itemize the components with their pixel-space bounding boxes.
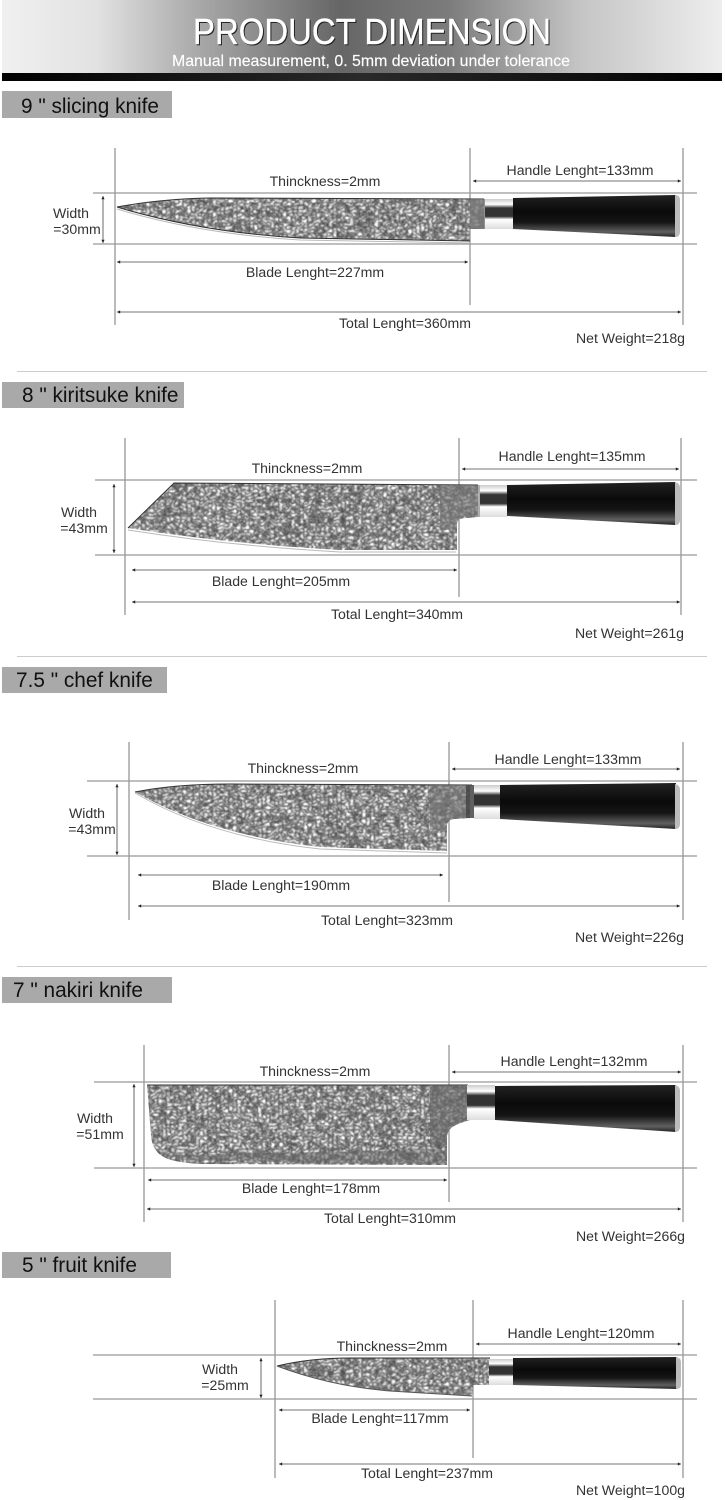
heading: 9 " slicing knife <box>21 95 159 118</box>
knife illustration <box>117 195 680 243</box>
width dimension <box>76 1084 134 1167</box>
panel: 8 inch kiritsuke knife <box>2 382 697 641</box>
width dimension <box>60 484 114 553</box>
total dimension: Total Lenght=323mm <box>321 912 453 928</box>
thickness label: Thinckness=2mm <box>270 173 380 189</box>
net weight: Net Weight=218g <box>576 330 685 346</box>
heading: 7.5 " chef knife <box>16 669 153 692</box>
panel: 5 inch fruit knife <box>2 1252 697 1498</box>
blade dimension: Blade Lenght=178mm <box>242 1180 380 1196</box>
thickness label: Thinckness=2mm <box>260 1063 370 1079</box>
total dimension: Total Lenght=340mm <box>331 606 463 622</box>
blade dimension: Blade Lenght=117mm <box>311 1410 449 1426</box>
handle dimension: Handle Lenght=133mm <box>507 162 653 178</box>
width dimension: Width <box>61 504 97 520</box>
width dimension: Width <box>77 1110 113 1126</box>
subtitle: Manual measurement, 0. 5mm deviation under tolerance <box>172 53 570 70</box>
panel: 7.5 inch chef knife <box>2 667 697 945</box>
knife illustration <box>147 1085 680 1165</box>
width dimension <box>53 196 103 243</box>
blade dimension: Blade Lenght=227mm <box>246 264 384 280</box>
thickness label: Thinckness=2mm <box>337 1338 447 1354</box>
heading: 7 " nakiri knife <box>13 979 143 1002</box>
width dimension: Width <box>69 805 105 821</box>
net weight: Net Weight=100g <box>576 1482 685 1498</box>
total dimension: Total Lenght=237mm <box>361 1465 493 1481</box>
handle dimension: Handle Lenght=135mm <box>499 448 645 464</box>
heading <box>2 91 172 118</box>
heading: 8 " kiritsuke knife <box>22 384 178 407</box>
width dimension: =43mm <box>68 821 116 837</box>
width dimension: =43mm <box>60 520 108 536</box>
blade dimension: Blade Lenght=205mm <box>212 573 350 589</box>
thickness label: Thinckness=2mm <box>252 460 362 476</box>
net weight: Net Weight=226g <box>575 929 684 945</box>
total dimension: Total Lenght=360mm <box>339 315 471 331</box>
width dimension: Width <box>53 205 89 221</box>
width dimension: Width <box>202 1361 238 1377</box>
handle dimension: Handle Lenght=132mm <box>501 1053 647 1069</box>
total dimension: Total Lenght=310mm <box>324 1210 456 1226</box>
net weight: Net Weight=261g <box>575 625 684 641</box>
heading <box>2 1252 171 1278</box>
knife illustration <box>135 783 680 853</box>
width dimension: =51mm <box>76 1126 124 1142</box>
handle dimension: Handle Lenght=133mm <box>495 751 641 767</box>
width dimension <box>201 1358 261 1398</box>
knife illustration <box>128 482 680 552</box>
width dimension <box>68 784 117 855</box>
title: PRODUCT DIMENSION <box>193 11 551 52</box>
width dimension: =30mm <box>53 221 101 237</box>
panel: 9 inch slicing knife <box>2 91 697 346</box>
blade dimension: Blade Lenght=190mm <box>212 877 350 893</box>
width dimension: =25mm <box>201 1377 249 1393</box>
panel: 7 inch nakiri knife <box>2 977 697 1244</box>
net weight: Net Weight=266g <box>576 1228 685 1244</box>
header banner <box>2 0 722 81</box>
heading <box>2 977 172 1003</box>
heading: 5 " fruit knife <box>22 1254 137 1277</box>
thickness label: Thinckness=2mm <box>248 760 358 776</box>
handle dimension: Handle Lenght=120mm <box>508 1325 654 1341</box>
knife illustration <box>277 1357 681 1396</box>
